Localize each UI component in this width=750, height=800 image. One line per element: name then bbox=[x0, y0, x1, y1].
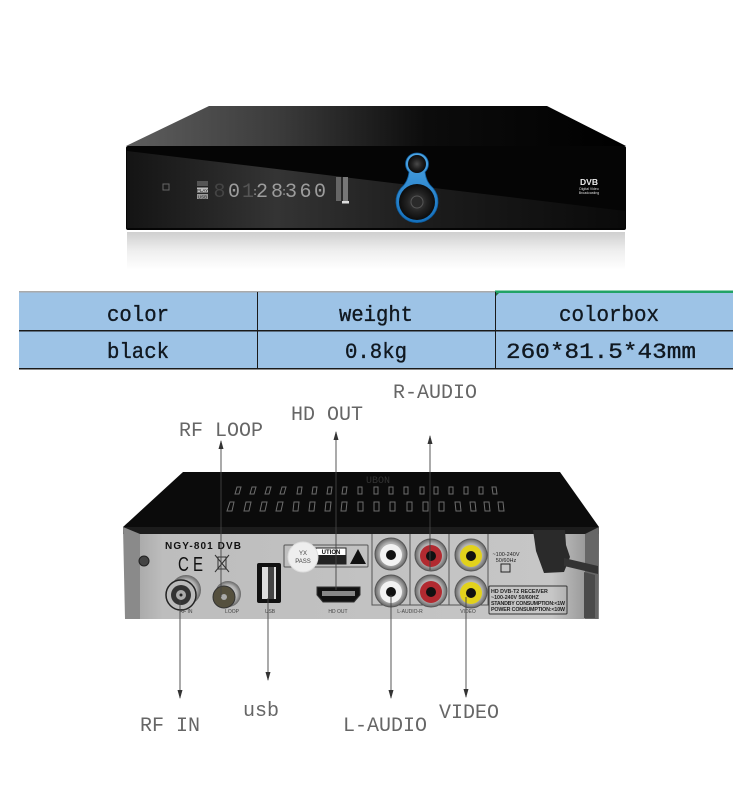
table cell text: black bbox=[107, 340, 169, 365]
reflection below the box bbox=[127, 232, 625, 270]
LCD digits bbox=[213, 181, 326, 204]
LCD level bars bbox=[336, 177, 349, 204]
RF IN connector bbox=[166, 575, 201, 610]
power cord bbox=[533, 530, 598, 618]
RF LOOP connector bbox=[213, 581, 241, 608]
box top face bbox=[126, 106, 626, 146]
rating label bbox=[489, 586, 567, 614]
CE mark: C E bbox=[178, 554, 203, 576]
back panel bbox=[125, 527, 599, 619]
panel port labels: LOOP bbox=[225, 609, 240, 615]
DVB logo: DVB bbox=[580, 177, 598, 187]
label: R-AUDIO with arrow bbox=[393, 382, 477, 570]
logo on top face: UBON bbox=[366, 476, 390, 487]
label: RF LOOP with arrow bbox=[179, 420, 263, 597]
LCD digits: : bbox=[281, 187, 287, 199]
table cell text: color bbox=[107, 303, 169, 328]
voltage text bbox=[492, 552, 520, 572]
rating label: STANDBY CONSUMPTION:<1W bbox=[491, 601, 565, 607]
rating label: HD DVB-T2 RECEIVER bbox=[491, 589, 548, 595]
rating label: POWER CONSUMPTION:<10W bbox=[491, 607, 565, 613]
label: usb with arrow bbox=[243, 598, 279, 723]
label: L-AUDIO with arrow bbox=[343, 595, 427, 738]
WEEE mark bbox=[215, 555, 229, 572]
label: RF IN with arrow: RF IN bbox=[140, 715, 200, 738]
label: usb with arrow: usb bbox=[243, 700, 279, 723]
LCD digits: 0 bbox=[314, 181, 326, 204]
spec table bbox=[19, 290, 733, 370]
panel port labels: VIDEO bbox=[460, 609, 476, 615]
label: RF LOOP with arrow: RF LOOP bbox=[179, 420, 263, 443]
display mode labels: USB bbox=[198, 194, 207, 200]
LCD digits: : bbox=[252, 187, 258, 199]
rear view: receiver bbox=[123, 472, 599, 619]
table cell text bbox=[107, 303, 696, 365]
LCD digits: 3 bbox=[285, 181, 297, 204]
label: VIDEO with arrow bbox=[439, 597, 499, 725]
front view: set-top box bbox=[126, 106, 626, 270]
panel port labels bbox=[179, 609, 476, 615]
table cell text: colorbox bbox=[559, 303, 659, 328]
label: L-AUDIO with arrow: L-AUDIO bbox=[343, 715, 427, 738]
receiver top face bbox=[123, 472, 599, 527]
red jacks bbox=[415, 539, 447, 607]
DVB logo bbox=[579, 177, 599, 195]
table cell text: 260*81.5*43mm bbox=[506, 340, 696, 365]
selected cell marker bbox=[495, 290, 733, 293]
LCD digits: 6 bbox=[299, 181, 312, 204]
model label: NGY-801 DVB bbox=[165, 541, 241, 552]
label: RF IN with arrow bbox=[140, 600, 200, 738]
caution sticker: UTION bbox=[322, 550, 340, 556]
glossy diagonal on front panel bbox=[127, 151, 625, 228]
voltage text: 50/60Hz bbox=[496, 558, 516, 564]
display mode labels bbox=[197, 181, 208, 200]
label: HD OUT with arrow bbox=[291, 404, 363, 590]
table background bbox=[19, 292, 733, 369]
table cell text: 0.8kg bbox=[345, 340, 407, 365]
panel port labels: RF IN bbox=[179, 609, 193, 615]
LCD digits: 1 bbox=[242, 181, 254, 204]
yellow jacks bbox=[455, 539, 487, 608]
label: R-AUDIO with arrow: R-AUDIO bbox=[393, 382, 477, 405]
LCD digits: 2 bbox=[256, 181, 268, 204]
table cell text: weight bbox=[339, 303, 413, 328]
DVB logo: Digital Video bbox=[579, 187, 599, 191]
AV jack group outline bbox=[372, 534, 488, 605]
caution sticker bbox=[284, 542, 368, 572]
LCD digits: 8 bbox=[271, 181, 283, 204]
IR sensor bbox=[163, 184, 169, 190]
rating label: ~100-240V 50/60HZ bbox=[491, 595, 540, 601]
caution sticker: YX bbox=[299, 551, 307, 557]
display mode labels: PLAY bbox=[197, 188, 208, 193]
HDMI port bbox=[317, 587, 360, 602]
USB port bbox=[257, 563, 281, 603]
panel port labels: HD OUT bbox=[328, 609, 348, 615]
vent slots bbox=[227, 487, 504, 511]
LCD digits: 8 bbox=[213, 181, 226, 204]
DVB logo: Broadcasting bbox=[579, 191, 599, 195]
caution sticker: PASS bbox=[295, 559, 311, 565]
label: HD OUT with arrow: HD OUT bbox=[291, 404, 363, 427]
table grid lines bbox=[19, 292, 733, 370]
box front panel bbox=[126, 146, 626, 230]
label: VIDEO with arrow: VIDEO bbox=[439, 702, 499, 725]
panel port labels: USB bbox=[265, 609, 276, 615]
white jacks bbox=[375, 538, 407, 607]
panel port labels: L-AUDIO-R bbox=[397, 609, 423, 615]
screw bbox=[139, 556, 149, 566]
voltage text: ~100-240V bbox=[492, 552, 520, 558]
LCD digits: 0 bbox=[228, 181, 240, 204]
control knobs bbox=[396, 153, 438, 223]
